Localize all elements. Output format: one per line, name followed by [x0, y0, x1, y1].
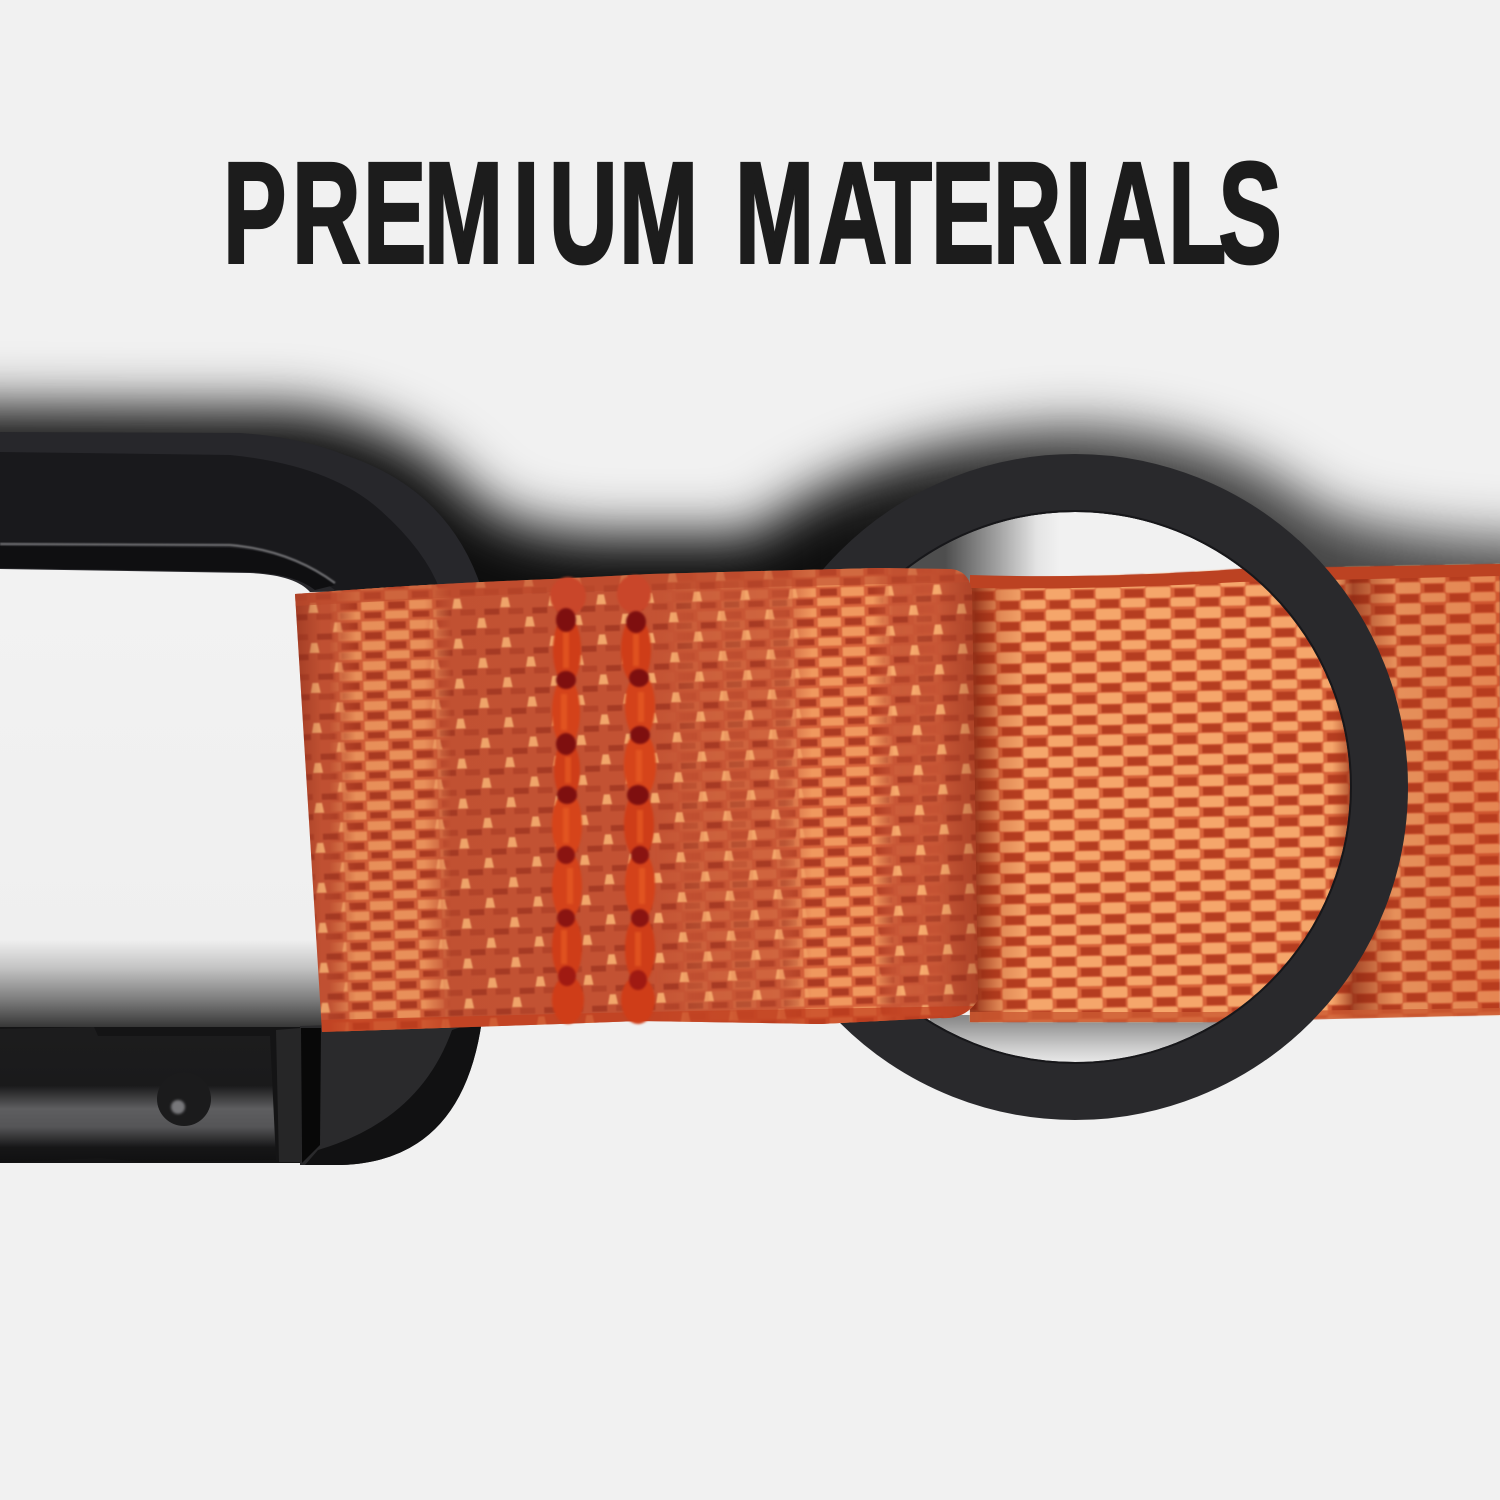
carabiner top bar outer rim: [0, 432, 482, 592]
title: PREMIUM MATERIALS: [223, 133, 1282, 293]
strap shading: [970, 564, 1500, 1022]
matte weave layer: [295, 568, 978, 1032]
left stitch row: [550, 577, 586, 1024]
carabiner highlight line: [0, 544, 335, 583]
ring opening, lower: [930, 1015, 1218, 1062]
strap weave: [970, 564, 1500, 1022]
panel bottom selvedge: [320, 1006, 975, 1034]
panel edge shading: [295, 570, 978, 1019]
carabiner bottom curve: [300, 1020, 482, 1165]
gate joint line: [301, 1028, 321, 1163]
strap bottom selvedge: [970, 1008, 1500, 1022]
carabiner top bar lower band: [0, 546, 335, 590]
black O-ring, rear part: [771, 483, 1379, 1091]
carabiner top bar face: [0, 452, 440, 590]
right stitch row: [617, 575, 656, 1024]
gate collar: [276, 1028, 301, 1162]
satin weave layer: [332, 568, 923, 1032]
carabiner opening with cast shadow: [0, 568, 330, 1034]
carabiner inner edge: [305, 1020, 482, 1165]
black carabiner: [0, 432, 482, 1165]
drop shadow behind hardware and strap: [0, 406, 1500, 700]
gate rivet: [157, 1072, 211, 1126]
stitching: [550, 575, 656, 1024]
strap top selvedge: [970, 564, 1500, 588]
gate pin: [0, 1027, 276, 1163]
front folded webbing panel: [295, 568, 978, 1032]
ring opening, upper: [908, 512, 1242, 583]
carabiner gate backing: [0, 1027, 305, 1163]
panel top selvedge: [295, 565, 972, 606]
black O-ring, front part over strap: [1160, 540, 1408, 1060]
rear strap webbing: [970, 564, 1500, 1022]
